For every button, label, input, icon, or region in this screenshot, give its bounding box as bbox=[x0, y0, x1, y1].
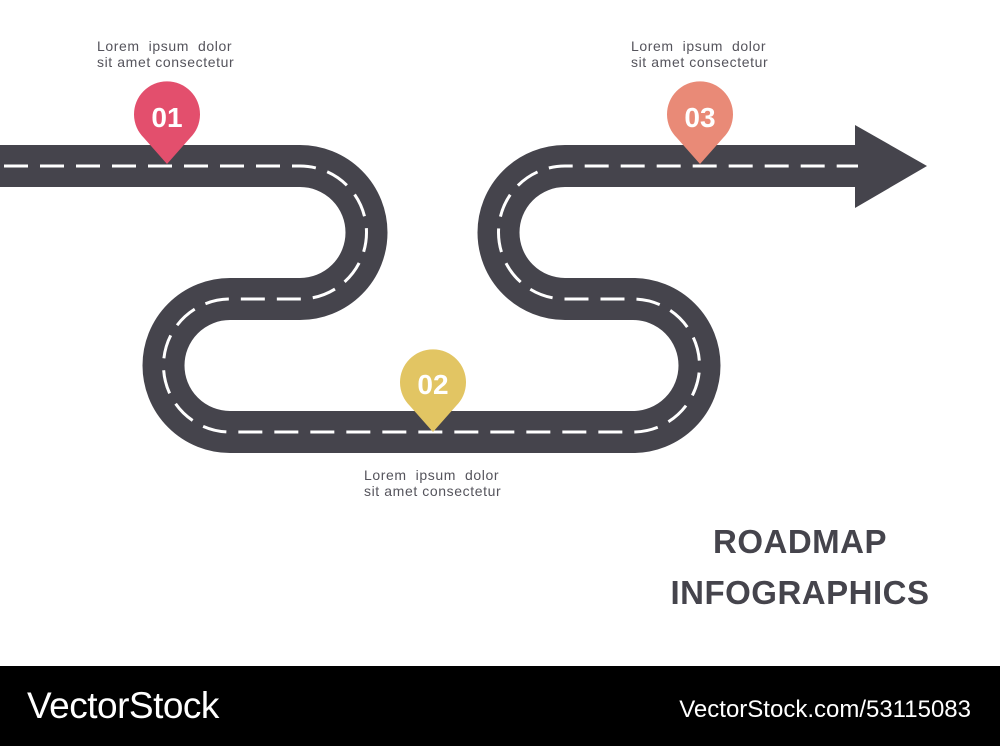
text 01: sit amet consectetur bbox=[97, 54, 234, 70]
pin 02 bbox=[400, 349, 466, 432]
title: INFOGRAPHICS bbox=[670, 574, 930, 611]
title bbox=[670, 523, 930, 611]
title: ROADMAP bbox=[713, 523, 887, 560]
pin 01 bbox=[134, 81, 200, 164]
pin 02: 02 bbox=[417, 369, 449, 400]
road bbox=[0, 125, 927, 432]
text 01: Lorem ipsum dolor bbox=[97, 38, 232, 54]
pin 01: 01 bbox=[151, 102, 183, 133]
footer bar: VectorStock.com/53115083 bbox=[679, 696, 971, 723]
text 02: Lorem ipsum dolor bbox=[364, 467, 499, 483]
text 03 bbox=[631, 38, 768, 70]
text 03: Lorem ipsum dolor bbox=[631, 38, 766, 54]
text 02 bbox=[364, 467, 501, 499]
pin 03: 03 bbox=[684, 102, 716, 133]
footer bar: VectorStock bbox=[27, 685, 220, 726]
text 02: sit amet consectetur bbox=[364, 483, 501, 499]
text 03: sit amet consectetur bbox=[631, 54, 768, 70]
footer bar bbox=[0, 666, 1000, 746]
text 01 bbox=[97, 38, 234, 70]
pin 03 bbox=[667, 81, 733, 164]
